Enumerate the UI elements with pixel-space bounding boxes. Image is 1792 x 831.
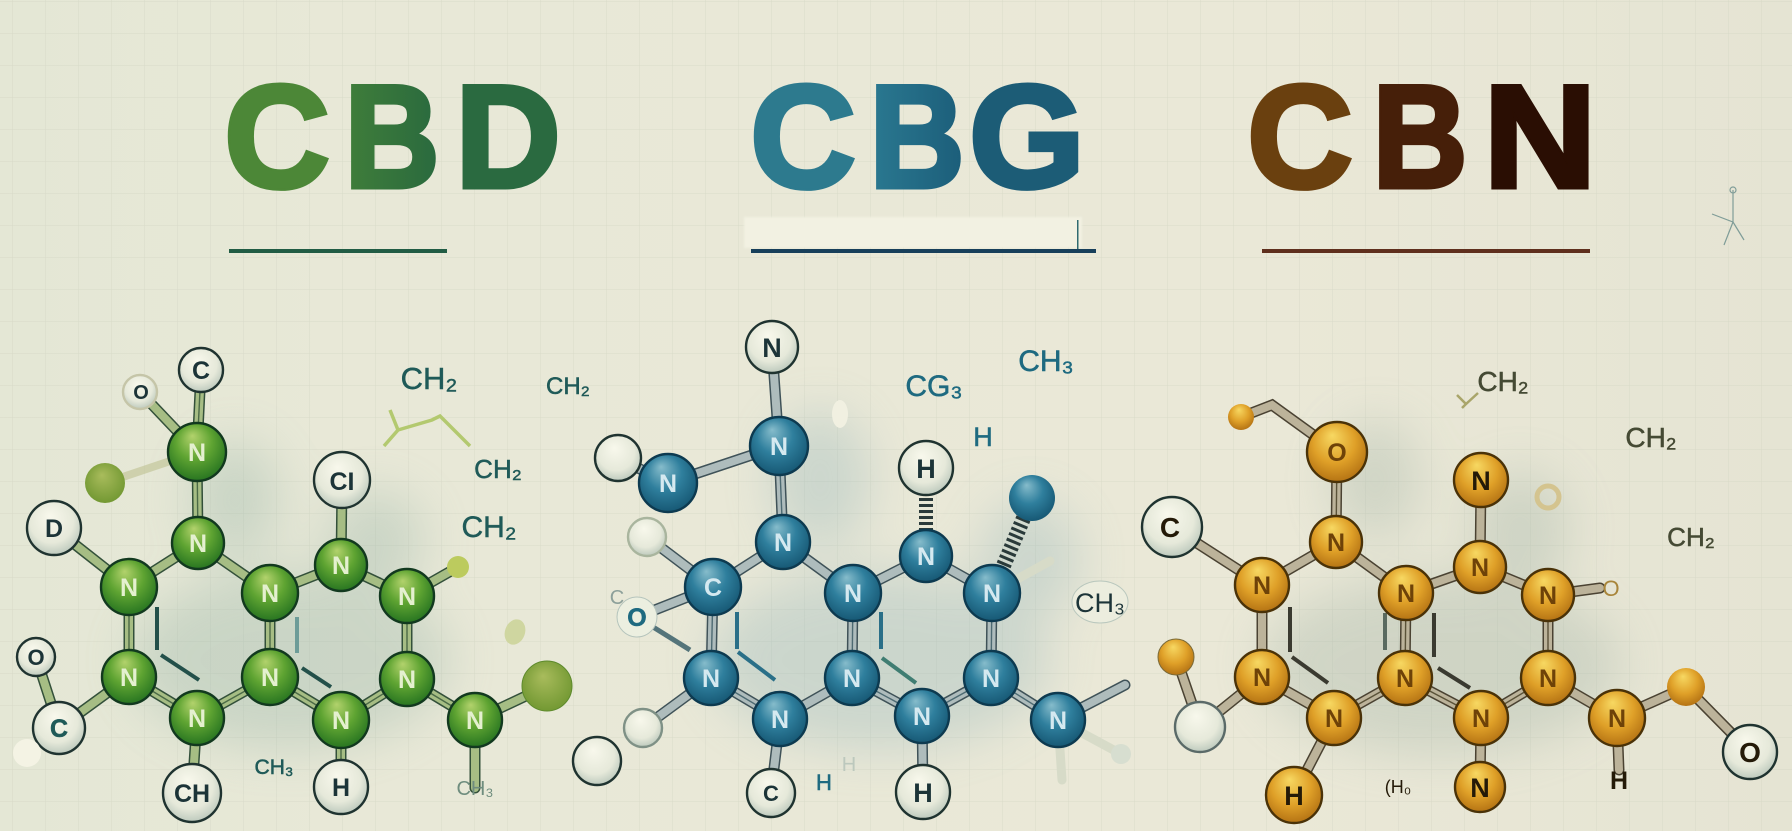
atom: N <box>750 417 808 475</box>
atom: H gold: H <box>1284 781 1304 811</box>
atom: O white with C: C <box>610 587 624 609</box>
atom: N: N <box>466 707 484 735</box>
atom: N white top <box>746 321 798 373</box>
underline: CBD <box>229 249 447 253</box>
label: H: H <box>816 770 832 795</box>
atom: N <box>380 652 434 706</box>
atom: CH white: CH <box>174 780 210 808</box>
atom: N <box>1522 569 1574 621</box>
atom: O white with C: O <box>627 604 647 632</box>
atom: H white <box>314 760 368 814</box>
atom: N: N <box>261 664 279 692</box>
heading: CBG: C <box>750 55 856 218</box>
label: H-D: (H₀ <box>1385 777 1411 797</box>
atom: H gold <box>1266 767 1322 823</box>
atom: N <box>1521 651 1575 705</box>
atom: N: N <box>1397 580 1415 608</box>
atom: N <box>380 569 434 623</box>
atom: N <box>1031 693 1085 747</box>
atom: N <box>825 651 879 705</box>
heading: CBD: B <box>345 56 439 219</box>
icon: green twig <box>384 410 470 446</box>
label: CH2: CH₂ <box>1625 422 1677 453</box>
atom: N: N <box>1396 665 1414 693</box>
atom: N: N <box>332 707 350 735</box>
atom: N <box>315 539 367 591</box>
atom: N gold lower <box>1455 762 1505 812</box>
atom: O white left <box>27 501 81 555</box>
panel: CBG <box>573 55 1131 819</box>
atom: white-green ball <box>573 737 621 785</box>
atom: N: N <box>1472 705 1490 733</box>
heading: CBG: G <box>969 56 1085 219</box>
atom: CH3 bubble <box>1072 581 1128 623</box>
label: H: H <box>973 422 993 452</box>
atom: C white <box>179 348 223 392</box>
heading: CBD: D <box>455 55 561 218</box>
molecule bonds: CBD <box>36 370 547 793</box>
atom: N: N <box>332 552 350 580</box>
label: CH2: CH₂ <box>1477 366 1529 397</box>
atom: N <box>242 565 298 621</box>
label: faded CH3: CH₃ <box>456 778 494 800</box>
atom: N: N <box>120 664 138 692</box>
atom: N <box>1378 651 1432 705</box>
atom: N <box>639 454 697 512</box>
icon: small gold ring <box>1537 486 1559 508</box>
atom: N: N <box>188 705 206 733</box>
atom: N <box>1307 691 1361 745</box>
heading: CBN: C <box>1247 55 1353 218</box>
atom: olive ball upper <box>85 463 125 503</box>
heading: CBD: C <box>224 55 330 218</box>
panel: CBN <box>1142 55 1777 823</box>
atom: C white: C <box>1160 512 1180 543</box>
label: CH2: CH₂ <box>462 511 516 544</box>
atom: O white: O <box>1739 737 1761 768</box>
atom: O white small: O <box>133 382 149 404</box>
atom: white ball <box>628 518 666 556</box>
atom: C white <box>1142 497 1202 557</box>
atom: C: C <box>704 574 722 602</box>
heading: CBN: B <box>1373 56 1467 219</box>
atom: N <box>172 517 224 569</box>
soft molecule shadow: CBD <box>130 440 450 750</box>
label: CH2: CH₂ <box>1667 522 1715 552</box>
atom: small gold <box>1228 404 1254 430</box>
atom: H white: H <box>332 774 350 802</box>
atom: O gold: O <box>1327 439 1347 467</box>
atom: N: N <box>913 703 931 731</box>
soft molecule shadow: CBG <box>710 410 1080 750</box>
icon: small molecule doodle top right <box>1712 187 1744 245</box>
atom: N: N <box>702 665 720 693</box>
atom: Cl white <box>314 452 370 508</box>
heading: CBG: B <box>870 56 964 219</box>
atom: N: N <box>1049 707 1067 735</box>
atom: N gold: N <box>1471 466 1491 496</box>
atom: gold right <box>1667 668 1705 706</box>
atom: N: N <box>844 580 862 608</box>
atom: N <box>1235 558 1289 612</box>
atom: N: N <box>261 580 279 608</box>
atom: white-blue ball <box>1175 702 1225 752</box>
atom: N: N <box>1327 529 1345 557</box>
atom: N gold <box>1454 453 1508 507</box>
atom: N: N <box>1539 665 1557 693</box>
white smudge above CBG underline <box>744 217 1082 248</box>
label: CG3: CG₃ <box>905 370 963 403</box>
atom: H white <box>899 441 953 495</box>
atom: N: N <box>1539 582 1557 610</box>
heading: CBD <box>224 55 561 219</box>
atom: N <box>170 691 224 745</box>
atom: N: N <box>189 530 207 558</box>
atom: H white <box>896 765 950 819</box>
atom: N: N <box>770 433 788 461</box>
atom: white ball lower <box>624 709 662 747</box>
atom: small yellow-green <box>447 556 469 578</box>
atom: N <box>101 559 157 615</box>
atom: C white <box>747 769 795 817</box>
atom: N <box>895 689 949 743</box>
atom: O white with C <box>610 587 657 637</box>
atom: N: N <box>398 583 416 611</box>
atom: N <box>1589 690 1645 746</box>
atom: N: N <box>983 580 1001 608</box>
label: CH3: CH₃ <box>1018 345 1074 378</box>
label: CH2: CH₂ <box>546 373 590 400</box>
atom: N <box>684 651 738 705</box>
atom: N: N <box>982 665 1000 693</box>
atom: N <box>1235 650 1289 704</box>
atom: faint drop <box>832 400 848 428</box>
atom: O white lower left <box>17 638 55 676</box>
atom: N <box>825 565 881 621</box>
atom: small white <box>13 739 41 767</box>
atom: N <box>753 692 807 746</box>
atom: C white: C <box>192 357 210 385</box>
atom: N <box>1454 691 1508 745</box>
atom: N <box>168 423 226 481</box>
atom: N <box>900 530 952 582</box>
atom: O white lower left: O <box>27 645 45 670</box>
atom: H white: H <box>913 778 933 808</box>
atom: C white: C <box>763 781 779 806</box>
atom: N: N <box>843 665 861 693</box>
atom: small gold left <box>1158 639 1194 675</box>
atom: N: N <box>1325 705 1343 733</box>
atom: Cl white: CI <box>330 468 354 496</box>
molecule bonds: CBG <box>618 347 1125 793</box>
atom: N gold lower: N <box>1470 773 1490 803</box>
atom: N <box>313 692 369 748</box>
label: O: O <box>1602 576 1620 601</box>
atom: H white: H <box>916 454 936 484</box>
atom: O white <box>1723 725 1777 779</box>
atom: N: N <box>1471 554 1489 582</box>
atom: N <box>102 650 156 704</box>
atom: N: N <box>774 529 792 557</box>
atom: blue ball <box>1009 475 1055 521</box>
atom: N: N <box>917 543 935 571</box>
atom: O gold <box>1307 422 1367 482</box>
heading: CBN: N <box>1484 56 1596 219</box>
atom: O white left: D <box>45 515 63 543</box>
soft molecule shadow: CBN <box>1260 420 1620 755</box>
atom: N <box>242 649 298 705</box>
label: faded H: H <box>842 754 856 776</box>
atom: N <box>1379 566 1433 620</box>
atom: N: N <box>188 439 206 467</box>
atom: O white small <box>123 375 157 409</box>
heading: CBG <box>750 55 1085 219</box>
atom: N <box>964 651 1018 705</box>
heading: CBN <box>1247 55 1596 219</box>
atom: N <box>1310 516 1362 568</box>
atom: N white top: N <box>762 333 782 363</box>
atom: N <box>964 565 1020 621</box>
atom: N <box>756 515 810 569</box>
atom: CH white <box>163 764 221 822</box>
label: CH2: CH₂ <box>401 361 457 396</box>
atom: olive ball right <box>522 661 572 711</box>
underline: CBN <box>1262 249 1590 253</box>
atom: C white lower left: C <box>50 715 68 743</box>
atom: white ball <box>595 435 641 481</box>
atom: CH3 bubble: CH₃ <box>1075 588 1125 618</box>
label: CH3: CH₃ <box>255 756 293 779</box>
atom: C white lower left <box>33 702 85 754</box>
molecule bonds: CBN <box>1172 405 1750 795</box>
atom: N: N <box>1608 705 1626 733</box>
atom: N: N <box>771 706 789 734</box>
underline: CBG <box>751 220 1096 253</box>
atom: N: N <box>398 666 416 694</box>
label: H: H <box>1610 767 1628 795</box>
atom: N: N <box>1253 664 1271 692</box>
atom: N: N <box>659 470 677 498</box>
atom: C <box>685 559 741 615</box>
label: CH3: CH₂ <box>474 454 522 484</box>
atom: N <box>1454 541 1506 593</box>
icon: faint leaf <box>501 616 529 648</box>
atom: N: N <box>120 574 138 602</box>
icon: small twig <box>1457 393 1478 408</box>
atom: N: N <box>1253 572 1271 600</box>
panel: CBD <box>13 55 590 822</box>
atom: pale ball <box>1111 744 1131 764</box>
atom: N <box>448 693 502 747</box>
